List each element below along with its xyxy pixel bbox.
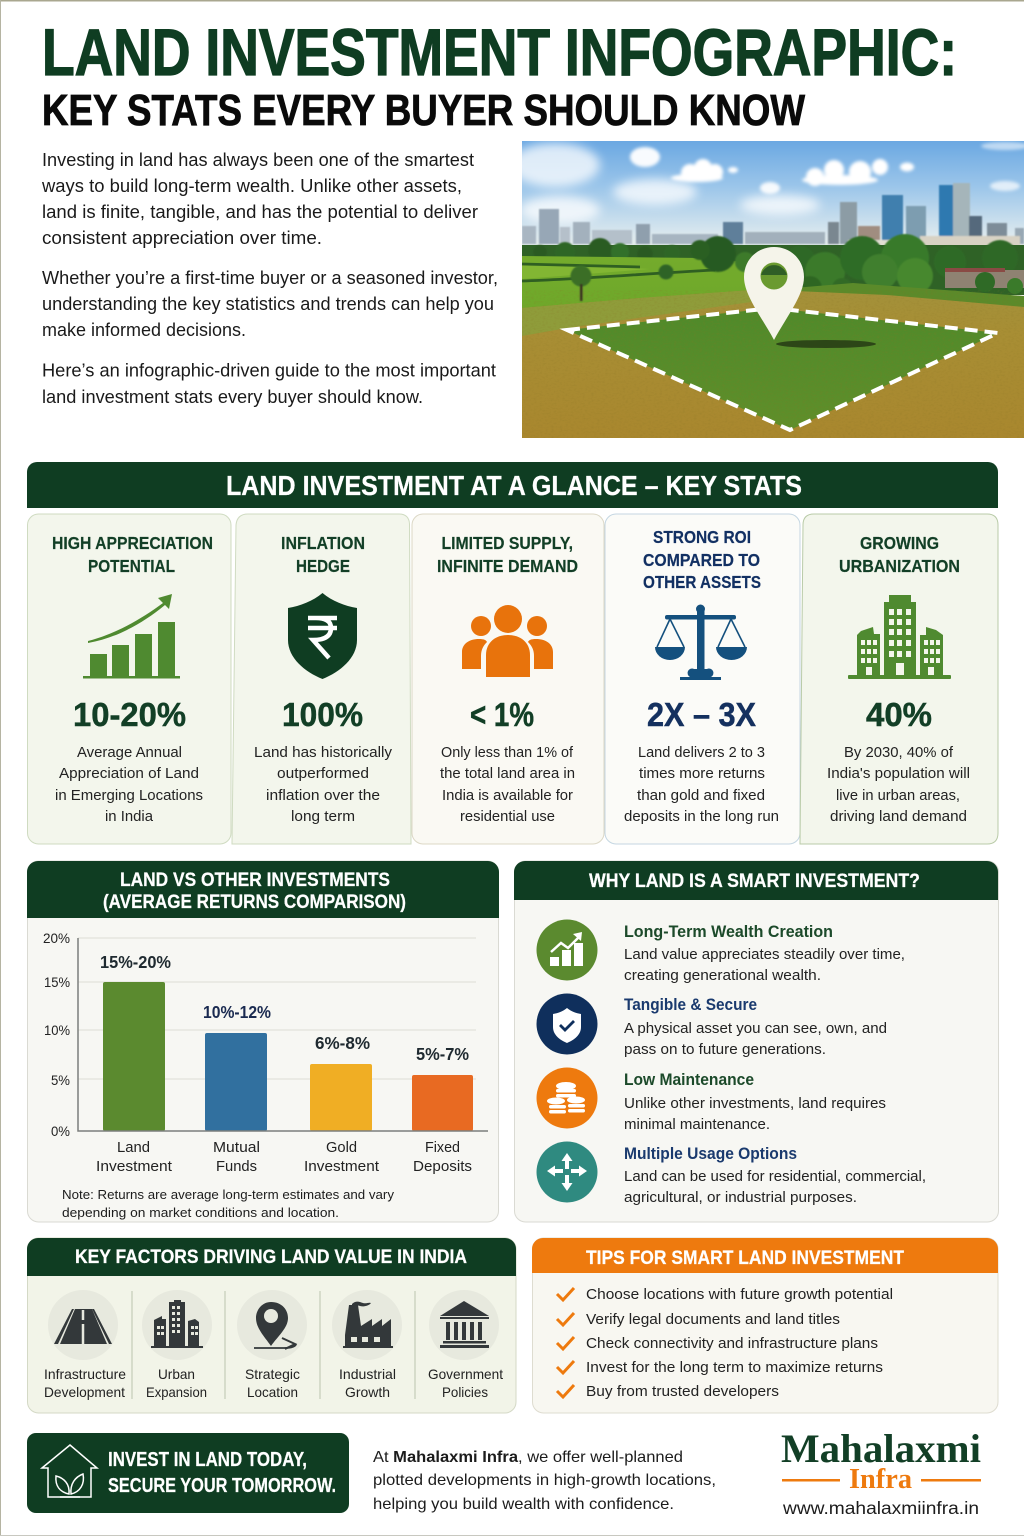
intro text: Whether you’re a first-time buyer or a seasoned investor, [42, 267, 498, 288]
panel: limited supply: < 1% [470, 697, 534, 734]
panel: strong ROI: STRONG ROI [653, 527, 751, 547]
item: multiple usage options [624, 1145, 926, 1206]
panel: strong ROI: 2X – 3X [647, 697, 757, 734]
panel: inflation hedge: 100% [282, 697, 363, 734]
intro text: land investment stats every buyer should know. [42, 386, 423, 407]
heading: tips: TIPS FOR SMART LAND INVESTMENT [586, 1248, 904, 1269]
bar chart: 6%-8% [315, 1033, 370, 1053]
item: tangible and secure [624, 996, 887, 1058]
label: industrial growth [339, 1366, 396, 1400]
label: infrastructure development: Infrastructure [44, 1366, 126, 1382]
item: tangible and secure: A physical asset you can see, own, and [624, 1021, 887, 1037]
label: urban expansion: Urban [158, 1366, 195, 1382]
panel: growing urbanization: 40% [866, 697, 932, 734]
panel: key factors driving land value [27, 1238, 516, 1413]
bar chart: Funds [216, 1158, 257, 1175]
panel: high appreciation potential: in India [105, 809, 154, 825]
icon: factory [332, 1290, 402, 1360]
checklist: Verify legal documents and land titles [586, 1312, 840, 1328]
icon: urban buildings [142, 1290, 212, 1360]
panel: growing urbanization: URBANIZATION [839, 556, 960, 576]
panel: limited supply [412, 514, 604, 844]
call to action banner: INVEST IN LAND TODAY, [108, 1449, 307, 1471]
panel: limited supply: the total land area in [440, 766, 575, 782]
bar chart [43, 930, 488, 1175]
panel: high appreciation potential [28, 514, 231, 844]
location pin [744, 247, 804, 340]
panel: inflation hedge: outperformed [277, 766, 369, 782]
bar chart: Investment [304, 1158, 380, 1175]
chart note: Note: Returns are average long-term estimates and vary [62, 1187, 395, 1202]
heading: why land [514, 861, 998, 900]
panel: strong ROI [605, 514, 800, 844]
panel: tips for smart land investment [532, 1238, 998, 1413]
panel: inflation hedge [232, 514, 411, 844]
intro text: Investing in land has always been one of the smartest [42, 149, 474, 170]
item: long-term wealth creation: creating generational wealth. [624, 968, 821, 984]
bar chart: Investment [96, 1158, 173, 1175]
item: long-term wealth creation: Long-Term Wealth Creation [624, 923, 833, 941]
intro text: make informed decisions. [42, 319, 246, 340]
intro text [41, 149, 498, 407]
item: low maintenance [624, 1071, 886, 1133]
panel: growing urbanization: GROWING [860, 533, 939, 553]
checklist: Choose locations with future growth potential [586, 1287, 893, 1303]
panel: limited supply: LIMITED SUPPLY, [442, 533, 573, 553]
label: strategic location: Location [247, 1384, 298, 1400]
panel: inflation hedge: inflation over the [266, 788, 380, 804]
bar chart: Deposits [413, 1158, 472, 1175]
item: low maintenance: Unlike other investments, land requires [624, 1096, 886, 1112]
icon: road [48, 1290, 118, 1360]
heading: why land: WHY LAND IS A SMART INVESTMENT? [589, 871, 920, 892]
logo: Mahalaxmi Infra [781, 1426, 981, 1518]
checklist: Check connectivity and infrastructure plans [586, 1336, 878, 1352]
panel: limited supply: INFINITE DEMAND [437, 556, 578, 576]
heading: land vs other investments: LAND VS OTHER INVESTMENTS [120, 869, 390, 891]
closing text: helping you build wealth with confidence. [373, 1496, 674, 1513]
panel: strong ROI: deposits in the long run [624, 809, 779, 825]
intro text: Here’s an infographic-driven guide to the most important [42, 360, 496, 380]
bar chart: 0% [51, 1123, 70, 1139]
panel: inflation hedge: HEDGE [296, 556, 350, 576]
panel: why land is a smart investment [514, 861, 998, 1222]
icon: rupee shield [288, 593, 357, 679]
panel: strong ROI: times more returns [639, 766, 765, 782]
panel: inflation hedge: long term [291, 809, 355, 825]
icon: government building [429, 1290, 499, 1360]
panel: high appreciation potential: Appreciation of Land [59, 766, 199, 782]
bar chart: Mutual [213, 1139, 260, 1156]
label: government policies: Policies [442, 1384, 488, 1400]
panel: limited supply: Only less than 1% of [441, 745, 574, 761]
icon: secure shield [536, 994, 598, 1054]
panel: growing urbanization: By 2030, 40% of [844, 745, 954, 761]
panel: high appreciation potential: 10-20% [73, 697, 186, 734]
bar chart: 15% [44, 974, 70, 990]
heading: tips [532, 1238, 998, 1273]
subtitle: KEY STATS EVERY BUYER SHOULD KNOW [42, 86, 805, 135]
intro text: understanding the key statistics and trends can help you [42, 293, 494, 314]
hero image: land plot with location pin [510, 141, 1024, 438]
item: tangible and secure: pass on to future generations. [624, 1042, 826, 1058]
closing text: At Mahalaxmi Infra, we offer well-planned [373, 1449, 683, 1466]
intro text: land is finite, tangible, and has the potential to deliver [42, 201, 478, 222]
panel: strong ROI: COMPARED TO [643, 550, 760, 570]
item: multiple usage options: agricultural, or industrial purposes. [624, 1190, 857, 1206]
panel: growing urbanization: live in urban areas, [836, 788, 960, 804]
panel: growing urbanization [800, 514, 998, 844]
panel: high appreciation potential: POTENTIAL [88, 556, 175, 576]
label: strategic location: Strategic [245, 1366, 300, 1382]
call to action banner: SECURE YOUR TOMORROW. [108, 1475, 336, 1497]
bar chart: Gold [326, 1139, 357, 1156]
checklist: Invest for the long term to maximize returns [586, 1360, 883, 1376]
section header: key stats: LAND INVESTMENT AT A GLANCE – KEY STATS [226, 470, 802, 501]
logo: Mahalaxmi Infra: www.mahalaxmiinfra.in [782, 1498, 979, 1518]
panel: inflation hedge: INFLATION [281, 533, 365, 553]
closing text: plotted developments in high-growth locations, [373, 1472, 716, 1489]
panel: high appreciation potential: HIGH APPRECIATION [52, 533, 213, 553]
icon: coin stacks [536, 1068, 598, 1128]
panel: limited supply: India is available for [442, 788, 573, 804]
panel: growing urbanization: India's population will [827, 766, 970, 782]
panel: strong ROI: than gold and fixed [637, 788, 765, 804]
item: long-term wealth creation [624, 923, 905, 984]
checklist [557, 1287, 893, 1400]
label: government policies: Government [428, 1366, 503, 1382]
chart note: depending on market conditions and location. [62, 1205, 339, 1220]
chart note [62, 1187, 395, 1220]
bar chart: 5%-7% [416, 1044, 469, 1064]
intro text: ways to build long-term wealth. Unlike other assets, [41, 175, 462, 196]
label: industrial growth: Industrial [339, 1366, 396, 1382]
icon: map pin with path [237, 1290, 307, 1360]
logo: Mahalaxmi Infra: Infra [849, 1464, 912, 1495]
icon: balance scale [655, 604, 747, 680]
label: industrial growth: Growth [345, 1384, 390, 1400]
icon: multi-direction arrows [536, 1142, 598, 1202]
intro text: consistent appreciation over time. [42, 227, 322, 248]
icon: city buildings [848, 595, 951, 679]
bar chart: 20% [43, 930, 70, 946]
logo: Mahalaxmi Infra: Mahalaxmi [781, 1426, 981, 1471]
section header: key stats [27, 462, 998, 508]
panel: land vs other investments [27, 861, 499, 1222]
panel: strong ROI: OTHER ASSETS [643, 572, 761, 592]
panel: strong ROI: Land delivers 2 to 3 [638, 745, 765, 761]
closing text [373, 1449, 716, 1513]
label: strategic location [245, 1366, 300, 1400]
item: tangible and secure: Tangible & Secure [624, 996, 757, 1014]
panel: inflation hedge: Land has historically [254, 745, 393, 761]
bar chart: Land [117, 1139, 150, 1156]
checklist: Buy from trusted developers [586, 1384, 779, 1400]
bar chart: 5% [51, 1072, 70, 1088]
panel: growing urbanization: driving land demand [830, 809, 967, 825]
label: urban expansion: Expansion [146, 1384, 207, 1400]
call to action banner [27, 1433, 349, 1513]
bar chart: Fixed [425, 1139, 460, 1156]
heading: key factors: KEY FACTORS DRIVING LAND VALUE IN INDIA [75, 1247, 467, 1268]
item: low maintenance: minimal maintenance. [624, 1117, 770, 1133]
icon: rising bar chart [83, 594, 180, 678]
bar chart: 10% [44, 1022, 70, 1038]
icon: house with sprout [42, 1445, 97, 1497]
icon: wealth growth [536, 920, 598, 980]
bar chart: 10%-12% [203, 1002, 271, 1022]
item: multiple usage options: Multiple Usage Options [624, 1145, 797, 1163]
heading: land vs other investments: (AVERAGE RETURNS COMPARISON) [103, 891, 406, 913]
heading: key factors [27, 1238, 516, 1276]
heading: land vs other investments [27, 861, 499, 918]
label: urban expansion [146, 1366, 207, 1400]
item: multiple usage options: Land can be used for residential, commercial, [624, 1169, 926, 1185]
label: infrastructure development [44, 1366, 126, 1400]
label: infrastructure development: Development [44, 1384, 125, 1400]
item: long-term wealth creation: Land value appreciates steadily over time, [624, 947, 905, 963]
label: government policies [428, 1366, 503, 1400]
panel: high appreciation potential: in Emerging Locations [55, 788, 203, 804]
panel: limited supply: residential use [460, 809, 555, 825]
bar chart: 15%-20% [100, 952, 171, 972]
item: low maintenance: Low Maintenance [624, 1071, 754, 1089]
panel: high appreciation potential: Average Annual [77, 745, 182, 761]
icon: group of people [462, 605, 553, 677]
